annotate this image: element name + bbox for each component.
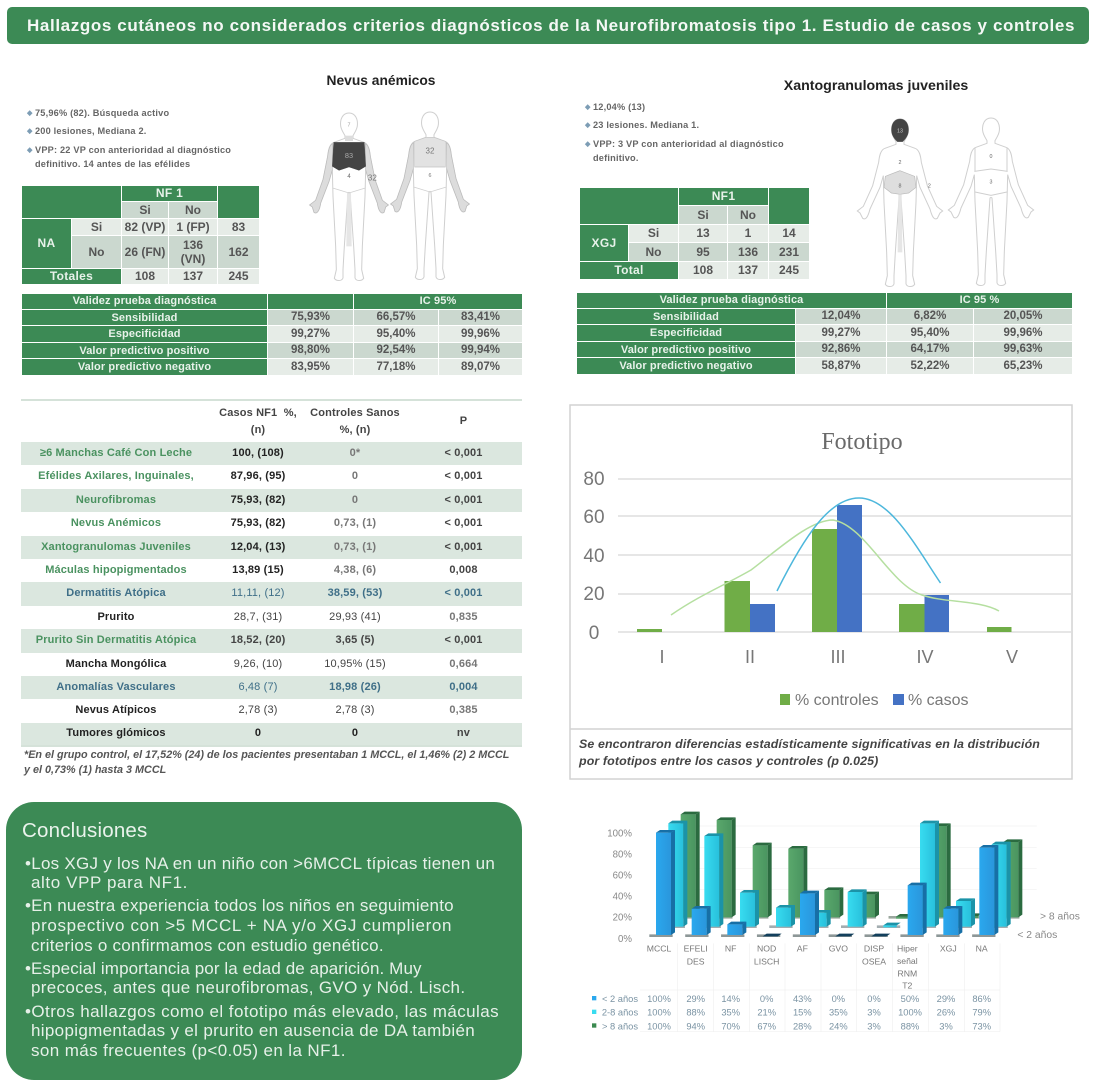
data table: 2 to 8 years: 2-8 años	[602, 1008, 638, 1018]
text: ◆	[585, 104, 591, 111]
y axis labels and grid: 40%	[613, 892, 632, 903]
series depth labels	[1017, 911, 1080, 941]
conclusions bullets: precoces, antes que neurofibromas, GVO y Nód. Lisch.	[31, 978, 465, 997]
body map: xantogranulomas, front: 2	[928, 183, 931, 189]
comparison table: cases vs controls: Dermatitis Atópica	[66, 587, 166, 599]
category labels: señal	[897, 956, 918, 966]
validity table: xantogranulomas: 95,40%	[910, 327, 950, 339]
contingency table: NA vs NF1: NF 1	[156, 186, 183, 200]
comparison table: cases vs controls: 75,93, (82)	[231, 494, 285, 506]
bars: % controles	[637, 529, 1012, 632]
validity table: xantogranulomas: 99,27%	[821, 327, 860, 339]
validity table: nevus anémicos: 95,40%	[376, 328, 416, 340]
comparison table: cases vs controls: Xantogranulomas Juveniles	[41, 541, 191, 553]
contingency table: NA vs NF1	[22, 186, 259, 284]
data table: 2 to 8 years: 88%	[686, 1008, 705, 1018]
validity table: xantogranulomas: Valor predictivo negativo	[619, 360, 753, 372]
comparison table: cases vs controls: nv	[457, 727, 470, 739]
comparison table: cases vs controls: 0	[352, 494, 358, 506]
comparison table: cases vs controls: Neurofibromas	[76, 494, 156, 506]
contingency table: XGJ vs NF1: Total	[614, 263, 644, 277]
validity table: xantogranulomas: Especificidad	[650, 327, 722, 339]
gridlines and y axis	[583, 469, 1072, 644]
body map: nevus anémicos, back	[390, 112, 470, 280]
data table: over 8 years: 94%	[686, 1021, 705, 1031]
body map: xantogranulomas, back	[948, 118, 1034, 286]
conclusions bullets: prospectivo con >5 MCCL + NA y/o XGJ cumplieron	[31, 916, 452, 935]
text: ◆	[27, 110, 33, 117]
comparison table: cases vs controls: 0,004	[449, 681, 478, 693]
contingency table: XGJ vs NF1: 137	[738, 263, 758, 277]
comparison table: cases vs controls: Anomalías Vasculares	[56, 681, 176, 693]
comparison table: cases vs controls: Prurito Sin Dermatitis Atópica	[36, 634, 196, 646]
chart caption: por fototipos entre los casos y controles (p 0.025)	[578, 754, 878, 768]
category labels: GVO	[829, 944, 848, 954]
y axis labels and grid: 0%	[618, 934, 632, 945]
body map: xantogranulomas, front: 8	[899, 183, 902, 189]
validity table: xantogranulomas: Sensibilidad	[653, 311, 719, 323]
gridlines and y axis: 40	[583, 546, 605, 567]
title text: Hallazgos cutáneos no considerados criterios diagnósticos de la Neurofibromatosis tipo 1. Estudio de casos y controles	[27, 16, 1075, 35]
comparison table: cases vs controls: 0,835	[449, 611, 478, 623]
gridlines and y axis: 0	[589, 623, 599, 644]
chart caption: Se encontraron diferencias estadísticamente significativas en la distribución	[579, 737, 1040, 751]
gridlines and y axis: 60	[583, 507, 605, 528]
comparison table: cases vs controls: 11,11, (12)	[231, 587, 285, 599]
3D bar chart by age	[592, 812, 1080, 1032]
x axis labels: II	[745, 647, 755, 667]
heading: Xantogranulomas juveniles: Xantogranulomas juveniles	[784, 78, 968, 94]
contingency table: XGJ vs NF1: No	[646, 245, 662, 259]
bullet list: xantogranulomas	[584, 102, 784, 163]
trend line: controles	[671, 520, 999, 615]
contingency table: NA vs NF1: 162	[228, 245, 249, 259]
x axis labels: I	[659, 647, 665, 667]
validity table: nevus anémicos: Especificidad	[108, 328, 181, 340]
category labels: AF	[797, 944, 808, 954]
series depth labels: < 2 años	[1017, 930, 1057, 941]
validity table: nevus anémicos: 75,93%	[291, 311, 330, 323]
validity table: nevus anémicos: Sensibilidad	[112, 312, 178, 324]
bullet list: xantogranulomas: definitivo.	[593, 153, 639, 163]
bullet list: xantogranulomas: 12,04% (13)	[593, 102, 645, 112]
comparison table: cases vs controls: Prurito	[97, 611, 135, 623]
comparison table: cases vs controls: 0*	[350, 447, 360, 459]
validity table: xantogranulomas	[577, 293, 1072, 374]
contingency table: NA vs NF1: NA	[38, 236, 55, 250]
data table: over 8 years: 70%	[721, 1021, 740, 1031]
body map: nevus anémicos, front: 83	[345, 151, 353, 160]
contingency table: XGJ vs NF1: 1	[745, 226, 751, 240]
comparison table: cases vs controls: Máculas hipopigmentados	[45, 564, 187, 576]
body map: xantogranulomas, front: 2	[899, 160, 902, 166]
validity table: nevus anémicos: IC 95%	[420, 295, 456, 307]
text: ◆	[27, 128, 33, 135]
category labels	[647, 944, 988, 991]
category labels: OSEA	[862, 956, 886, 966]
y axis labels and grid: 80%	[613, 850, 632, 861]
panel: fototipo chart	[569, 404, 1073, 780]
conclusions bullets: son más frecuentes (p<0.05) en la NF1.	[31, 1041, 346, 1060]
series: 2 to 8 years	[668, 821, 1011, 927]
bullet list: nevus anémicos	[26, 108, 231, 169]
conclusions bullets: •En nuestra experiencia todos los niños en seguimiento	[25, 896, 454, 915]
comparison table: cases vs controls: 75,93, (82)	[231, 517, 285, 529]
legend	[780, 692, 968, 709]
data table: 2 to 8 years	[592, 1008, 991, 1018]
data table: over 8 years: 100%	[647, 1021, 671, 1031]
comparison table: cases vs controls: < 0,001	[444, 634, 483, 646]
contingency table: NA vs NF1: No	[185, 203, 201, 217]
contingency table: NA vs NF1: Si	[139, 203, 151, 217]
validity table: xantogranulomas: 92,86%	[821, 343, 860, 355]
validity table: xantogranulomas: 52,22%	[910, 360, 950, 372]
title banner	[7, 7, 1089, 44]
bars: % casos	[750, 505, 949, 632]
comparison table: cases vs controls: 0	[255, 727, 261, 739]
body map: nevus anémicos, back: 32	[426, 147, 435, 156]
footnote	[24, 749, 509, 776]
contingency table: NA vs NF1: Totales	[50, 269, 93, 283]
comparison table: cases vs controls: Nevus Anémicos	[71, 517, 161, 529]
contingency table: NA vs NF1: 83	[232, 220, 245, 234]
data table: 2 to 8 years: 21%	[757, 1008, 776, 1018]
category labels: NF	[725, 944, 736, 954]
category labels: NOD	[757, 944, 776, 954]
validity table: nevus anémicos: Valor predictivo negativo	[78, 361, 211, 373]
conclusions bullets: •Los XGJ y los NA en un niño con >6MCCL típicas tienen un	[25, 854, 495, 873]
conclusions bullets: •Especial importancia por la edad de aparición. Muy	[25, 959, 422, 978]
contingency table: XGJ vs NF1: XGJ	[592, 236, 616, 250]
comparison table: cases vs controls: < 0,001	[444, 470, 483, 482]
validity table: xantogranulomas: IC 95 %	[960, 294, 999, 306]
validity table: nevus anémicos: 99,27%	[291, 328, 330, 340]
contingency table: XGJ vs NF1: 245	[779, 263, 799, 277]
data table: over 8 years: 67%	[757, 1021, 776, 1031]
chart caption	[578, 737, 1040, 768]
contingency table: NA vs NF1: 137	[183, 269, 203, 283]
y axis labels and grid: 60%	[613, 871, 632, 882]
conclusions heading: Conclusiones	[22, 819, 147, 842]
series: over 8 years	[681, 812, 1022, 919]
bullet list: nevus anémicos: 75,96% (82). Búsqueda activo	[35, 108, 169, 118]
comparison table: cases vs controls: 18,52, (20)	[231, 634, 285, 646]
data table: 2 to 8 years: 35%	[721, 1008, 740, 1018]
series: under 2 years	[656, 830, 998, 935]
legend: % controles	[795, 692, 879, 709]
comparison table: cases vs controls: 0	[352, 727, 358, 739]
heading: Nevus anémicos: Nevus anémicos	[327, 73, 435, 88]
text: ◆	[27, 147, 33, 154]
conclusions bullets: hipopigmentadas y el prurito en ausencia de DA también	[31, 1021, 475, 1040]
validity table: nevus anémicos: 83,41%	[461, 311, 500, 323]
data table: over 8 years: 24%	[829, 1021, 848, 1031]
contingency table: NA vs NF1: No	[88, 245, 104, 259]
comparison table: cases vs controls: 0,664	[449, 658, 478, 670]
zero-value markers	[763, 934, 890, 936]
validity table: nevus anémicos: 66,57%	[376, 311, 416, 323]
data table: under 2 years: 0%	[760, 994, 773, 1004]
contingency table: NA vs NF1: 1 (FP)	[176, 220, 210, 234]
validity table: nevus anémicos: 98,80%	[291, 344, 330, 356]
trend line: casos	[777, 498, 940, 591]
contingency table: NA vs NF1: 26 (FN)	[125, 245, 165, 259]
body map: nevus anémicos, front: 32	[368, 173, 377, 182]
legend: % casos	[908, 692, 968, 709]
contingency table: NA vs NF1: Si	[91, 220, 102, 234]
comparison table: cases vs controls: Tumores glómicos	[66, 727, 166, 739]
category labels: RNM	[897, 968, 917, 978]
bullet list: xantogranulomas: VPP: 3 VP con anterioridad al diagnóstico	[593, 139, 784, 149]
comparison table: cases vs controls: 29,93 (41)	[329, 611, 381, 623]
data table: under 2 years: 0%	[867, 994, 881, 1004]
contingency table: XGJ vs NF1: 13	[696, 226, 710, 240]
conclusions bullets: alto VPP para NF1.	[31, 873, 188, 892]
validity table: xantogranulomas: 99,63%	[1003, 343, 1042, 355]
comparison table: cases vs controls: < 0,001	[444, 447, 483, 459]
data table: under 2 years: 29%	[686, 994, 705, 1004]
data table: under 2 years: 14%	[721, 994, 740, 1004]
category labels: MCCL	[647, 944, 671, 954]
category labels: Hiper	[897, 944, 918, 954]
comparison table: cases vs controls: 12,04, (13)	[231, 541, 285, 553]
panel: conclusions	[6, 802, 522, 1080]
x axis labels	[659, 647, 1018, 667]
data table: under 2 years	[592, 994, 991, 1004]
body map: nevus anémicos, front: 4	[347, 174, 351, 180]
data table: 2 to 8 years: 15%	[793, 1008, 812, 1018]
comparison table: cases vs controls: (n)	[251, 424, 265, 436]
validity table: nevus anémicos: Validez prueba diagnóstica	[73, 295, 216, 307]
validity table: nevus anémicos: 99,94%	[461, 344, 500, 356]
category labels: DISP	[864, 944, 884, 954]
series depth labels: > 8 años	[1040, 911, 1080, 922]
comparison table: cases vs controls: 0,385	[449, 704, 478, 716]
footnote: y el 0,73% (1) hasta 3 MCCL	[24, 764, 166, 776]
data table: over 8 years: 73%	[972, 1021, 991, 1031]
data table: over 8 years: 3%	[867, 1021, 881, 1031]
comparison table: cases vs controls: 2,78 (3)	[238, 704, 278, 716]
contingency table: NA vs NF1: 245	[228, 269, 249, 283]
validity table: nevus anémicos: 99,96%	[461, 328, 500, 340]
contingency table: XGJ vs NF1: 14	[782, 226, 796, 240]
comparison table: cases vs controls: 0	[352, 470, 358, 482]
comparison table: cases vs controls: Mancha Mongólica	[66, 658, 166, 670]
contingency table: NA vs NF1: 136	[183, 238, 203, 252]
comparison table: cases vs controls: < 0,001	[444, 494, 483, 506]
comparison table: cases vs controls: 100, (108)	[232, 447, 284, 459]
data table: under 2 years: < 2 años	[602, 994, 638, 1004]
comparison table: cases vs controls: 0,73, (1)	[334, 541, 376, 553]
data table: under 2 years: 29%	[937, 994, 955, 1004]
comparison table: cases vs controls: < 0,001	[444, 517, 483, 529]
contingency table: XGJ vs NF1	[580, 188, 809, 279]
validity table: xantogranulomas: 20,05%	[1003, 310, 1042, 322]
comparison table: cases vs controls: 3,65 (5)	[335, 634, 375, 646]
comparison table: cases vs controls: 6,48 (7)	[238, 681, 278, 693]
comparison table: cases vs controls: 28,7, (31)	[234, 611, 282, 623]
validity table: xantogranulomas: 12,04%	[821, 310, 860, 322]
data table: 2 to 8 years: 100%	[647, 1008, 671, 1018]
conclusions bullets	[25, 854, 499, 1060]
validity table: xantogranulomas: 64,17%	[910, 343, 950, 355]
comparison table: cases vs controls: 87,96, (95)	[231, 470, 285, 482]
bullet list: xantogranulomas: 23 lesiones. Mediana 1.	[593, 120, 699, 130]
contingency table: XGJ vs NF1: Si	[648, 226, 659, 240]
conclusions bullets: criterios o confirmamos con estudio genético.	[31, 936, 384, 955]
data table: under 2 years: 100%	[647, 994, 671, 1004]
category labels: T2	[902, 981, 913, 991]
contingency table: NA vs NF1: 108	[135, 269, 155, 283]
comparison table: cases vs controls: %, (n)	[340, 424, 370, 436]
comparison table: cases vs controls: < 0,001	[444, 587, 483, 599]
validity table: nevus anémicos	[22, 294, 522, 375]
contingency table: XGJ vs NF1: Si	[697, 208, 709, 222]
floor shadows	[649, 917, 1027, 936]
bullet list: nevus anémicos: definitivo. 14 antes de las efélides	[35, 159, 190, 169]
comparison table: cases vs controls: 4,38, (6)	[334, 564, 376, 576]
contingency table: XGJ vs NF1: 136	[738, 245, 758, 259]
body map: nevus anémicos, front	[309, 112, 389, 281]
data table: over 8 years: 28%	[793, 1021, 812, 1031]
body map: xantogranulomas, back: 3	[990, 180, 993, 186]
data table: over 8 years: 88%	[901, 1021, 919, 1031]
bullet list: nevus anémicos: VPP: 22 VP con anterioridad al diagnóstico	[35, 145, 231, 155]
bullet list: nevus anémicos: 200 lesiones, Mediana 2.	[35, 126, 147, 136]
validity table: nevus anémicos: 92,54%	[376, 344, 416, 356]
comparison table: cases vs controls: P	[460, 415, 467, 427]
category labels: EFELI	[684, 944, 708, 954]
data table: 2 to 8 years: 79%	[972, 1008, 991, 1018]
comparison table: cases vs controls: 0,73, (1)	[334, 517, 376, 529]
contingency table: XGJ vs NF1: 231	[779, 245, 799, 259]
y axis labels and grid: 20%	[613, 913, 632, 924]
comparison table: cases vs controls: 18,98 (26)	[329, 681, 381, 693]
validity table: xantogranulomas: 99,96%	[1003, 327, 1042, 339]
validity table: xantogranulomas: 65,23%	[1003, 360, 1042, 372]
contingency table: NA vs NF1: (VN)	[181, 252, 205, 266]
gridlines and y axis: 80	[583, 469, 605, 490]
comparison table: cases vs controls: 9,26, (10)	[234, 658, 282, 670]
body map: xantogranulomas, back: 0	[990, 154, 993, 160]
y axis labels and grid	[607, 826, 1037, 1032]
footnote: *En el grupo control, el 17,52% (24) de los pacientes presentaban 1 MCCL, el 1,46% (2) 2 MCCL	[24, 749, 509, 761]
body map: nevus anémicos, front: 7	[348, 122, 351, 128]
contingency table: XGJ vs NF1: No	[740, 208, 756, 222]
data table: over 8 years: 3%	[939, 1021, 953, 1031]
body map: nevus anémicos, back: 6	[429, 173, 432, 179]
data table: 2 to 8 years: 35%	[829, 1008, 848, 1018]
chart title: Fototipo	[821, 429, 903, 455]
comparison table: cases vs controls: Nevus Atípicos	[75, 704, 157, 716]
x axis labels: V	[1006, 647, 1018, 667]
contingency table: XGJ vs NF1: 95	[696, 245, 710, 259]
validity table: nevus anémicos: 77,18%	[376, 361, 416, 373]
validity table: nevus anémicos: 89,07%	[461, 361, 500, 373]
comparison table: cases vs controls: 38,59, (53)	[328, 587, 382, 599]
validity table: xantogranulomas: Validez prueba diagnóstica	[660, 294, 803, 306]
x axis labels: III	[830, 647, 846, 667]
comparison table: cases vs controls: 10,95% (15)	[324, 658, 386, 670]
y axis labels and grid: 100%	[607, 829, 632, 840]
category labels: NA	[976, 944, 988, 954]
comparison table: cases vs controls: 13,89 (15)	[232, 564, 284, 576]
text: ◆	[585, 122, 591, 129]
data table: 2 to 8 years: 100%	[898, 1008, 922, 1018]
category labels: LISCH	[754, 956, 779, 966]
body map: xantogranulomas, front: 13	[897, 128, 903, 134]
data table: under 2 years: 86%	[972, 994, 991, 1004]
comparison table: cases vs controls: < 0,001	[444, 541, 483, 553]
validity table: xantogranulomas: Valor predictivo positivo	[621, 344, 751, 356]
data table: over 8 years: > 8 años	[602, 1021, 638, 1031]
comparison table: cases vs controls: Casos NF1 %,	[219, 406, 297, 418]
comparison table: cases vs controls: Controles Sanos	[310, 406, 400, 418]
data table: over 8 years	[592, 1021, 991, 1031]
validity table: nevus anémicos: 83,95%	[291, 361, 330, 373]
contingency table: XGJ vs NF1: NF1	[712, 189, 735, 203]
comparison table: cases vs controls: Efélides Axilares, Inguinales,	[38, 470, 194, 482]
contingency table: NA vs NF1: 82 (VP)	[125, 220, 165, 234]
data table: 2 to 8 years: 3%	[867, 1008, 881, 1018]
validity table: xantogranulomas: 6,82%	[914, 310, 946, 322]
x axis labels: IV	[916, 647, 934, 667]
data table: under 2 years: 50%	[901, 994, 919, 1004]
comparison table: cases vs controls: ≥6 Manchas Café Con Leche	[40, 447, 192, 459]
validity table: nevus anémicos: Valor predictivo positivo	[79, 345, 210, 357]
data table: under 2 years: 43%	[793, 994, 812, 1004]
category labels: DES	[687, 956, 705, 966]
comparison table: cases vs controls: 0,008	[449, 564, 478, 576]
conclusions bullets: •Otros hallazgos como el fototipo más elevado, las máculas	[25, 1002, 499, 1021]
data table: 2 to 8 years: 26%	[937, 1008, 955, 1018]
comparison table: cases vs controls: 2,78 (3)	[335, 704, 375, 716]
data table: under 2 years: 0%	[832, 994, 845, 1004]
gridlines and y axis: 20	[583, 584, 605, 605]
contingency table: XGJ vs NF1: 108	[693, 263, 713, 277]
validity table: xantogranulomas: 58,87%	[821, 360, 860, 372]
category labels: XGJ	[940, 944, 957, 954]
body map: xantogranulomas, front	[856, 118, 944, 287]
comparison table: cases vs controls	[21, 399, 522, 747]
text: ◆	[585, 141, 591, 148]
